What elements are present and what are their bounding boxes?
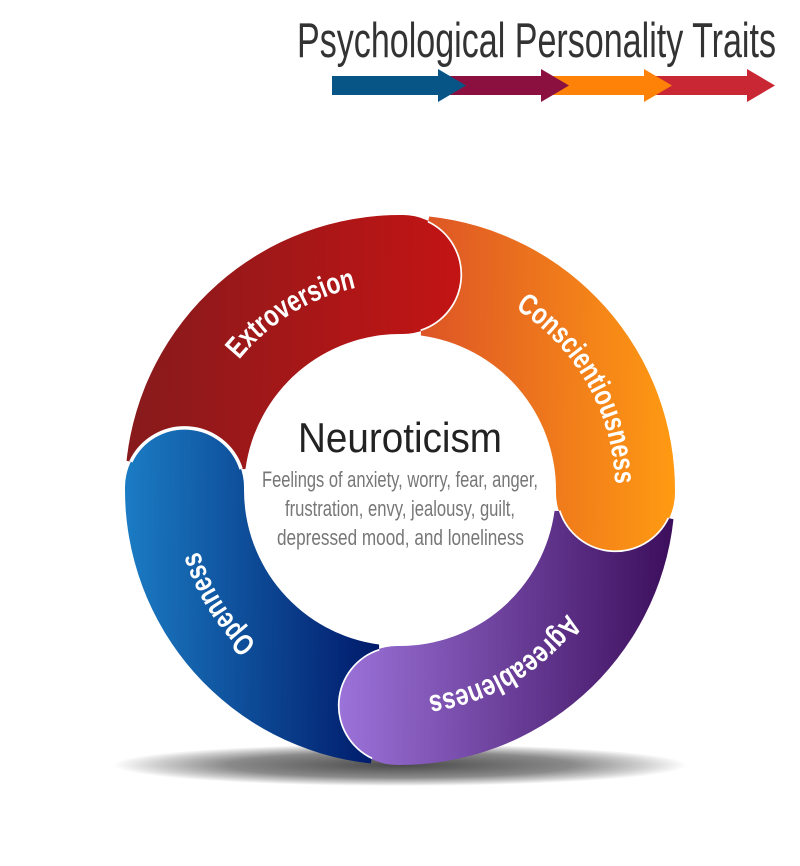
label: agreeableness: Agreeableness	[430, 614, 580, 712]
center heading: Neuroticism	[298, 414, 502, 461]
center description: depressed mood, and loneliness	[277, 525, 524, 550]
ground shadow	[113, 744, 687, 786]
label: openness: Openness	[185, 553, 253, 654]
center description: frustration, envy, jealousy, guilt,	[285, 496, 515, 521]
segment: conscientiousness	[418, 216, 678, 553]
segment: openness	[122, 427, 382, 764]
segment: extroversion	[126, 212, 463, 472]
center description: Feelings of anxiety, worry, fear, anger,	[262, 467, 538, 492]
center description	[262, 467, 538, 550]
ring diagram	[122, 212, 678, 768]
arrow banner	[332, 69, 775, 102]
label: conscientiousness: Conscientiousness	[519, 294, 631, 483]
label: extroversion: Extroversion	[224, 273, 355, 359]
segment: agreeableness	[337, 508, 674, 768]
